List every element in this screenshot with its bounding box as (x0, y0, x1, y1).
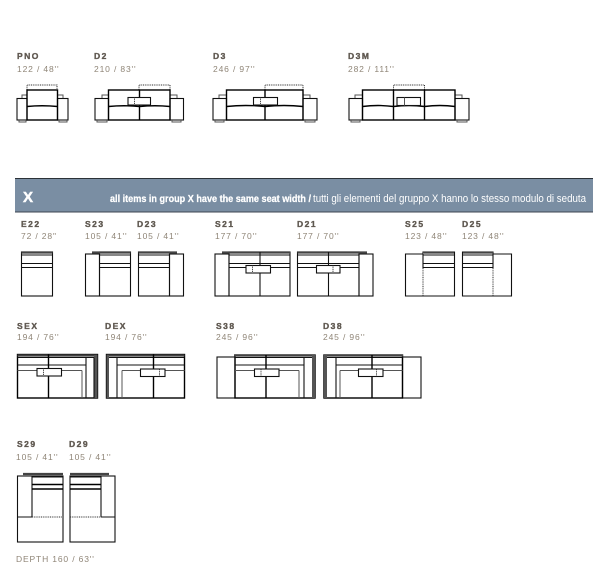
model D3M (348, 51, 469, 122)
model S21: 177 / 70'' (215, 231, 257, 241)
icon: S23 module (86, 252, 130, 296)
model D21: 177 / 70'' (297, 231, 339, 241)
model D29: D29 (69, 439, 89, 449)
model S21 (215, 219, 290, 296)
icon: S29 chaise (18, 474, 63, 542)
icon: D2 sofa (95, 85, 184, 122)
model D2 (94, 51, 184, 122)
model D2: D2 (94, 51, 108, 61)
model SEX: SEX (17, 321, 39, 331)
model E22: 72 / 28" (21, 231, 57, 241)
icon: D21 sofa (298, 252, 373, 296)
model S38: 245 / 96'' (216, 332, 258, 342)
model S29 (16, 439, 63, 542)
model D29 (69, 439, 115, 542)
model D23 (137, 219, 184, 296)
model D25: 123 / 48'' (462, 231, 504, 241)
model D21 (297, 219, 373, 296)
model PNO: 122 / 48'' (17, 64, 59, 74)
model SEX (17, 321, 98, 398)
model SEX: 194 / 76'' (17, 332, 59, 342)
model PNO: PNO (17, 51, 40, 61)
icon: D3 sofa (213, 85, 317, 122)
model D2: 210 / 83'' (94, 64, 136, 74)
icon: DEX corner sofa (106, 354, 184, 398)
model PNO (17, 51, 68, 122)
icon: SEX corner sofa (18, 354, 98, 398)
banner: group X: X (23, 189, 33, 206)
model S25 (405, 219, 454, 296)
model S25: S25 (405, 219, 425, 229)
model S29: S29 (17, 439, 37, 449)
banner: group X: tutti gli elementi del gruppo X hanno lo stesso modulo di seduta (313, 193, 587, 205)
icon: S25 module (406, 252, 454, 296)
model E22: E22 (21, 219, 41, 229)
model DEX: 194 / 76'' (105, 332, 147, 342)
icon: PNO armchair (17, 85, 68, 122)
model D3 (213, 51, 317, 122)
model E22 (21, 219, 57, 296)
model D38 (323, 321, 421, 398)
model D23: 105 / 41'' (137, 231, 179, 241)
model S23: S23 (85, 219, 105, 229)
model D3M: 282 / 111'' (348, 64, 395, 74)
icon: D3M sofa (349, 85, 469, 122)
model D21: D21 (297, 219, 317, 229)
banner: group X: all items in group X have the same seat width / (110, 193, 311, 205)
model S21: S21 (215, 219, 235, 229)
model DEX (105, 321, 184, 398)
icon: D29 chaise (70, 474, 115, 542)
banner: group X (15, 178, 593, 212)
model D23: D23 (137, 219, 157, 229)
model D38: D38 (323, 321, 343, 331)
model D25: D25 (462, 219, 482, 229)
model S38: S38 (216, 321, 236, 331)
model S23 (85, 219, 130, 296)
model D3: D3 (213, 51, 227, 61)
icon: E22 module (22, 252, 52, 296)
depth note: DEPTH 160 / 63'' (16, 554, 95, 564)
model D25 (462, 219, 512, 296)
model S23: 105 / 41'' (85, 231, 127, 241)
model D3: 246 / 97'' (213, 64, 255, 74)
model DEX: DEX (105, 321, 127, 331)
icon: D23 module (138, 252, 184, 296)
icon: D38 corner sofa (324, 355, 421, 398)
icon: S38 corner sofa (217, 355, 315, 398)
model D3M: D3M (348, 51, 370, 61)
model S25: 123 / 48'' (405, 231, 447, 241)
model S29: 105 / 41'' (16, 452, 58, 462)
model D38: 245 / 96'' (323, 332, 365, 342)
icon: D25 module (462, 252, 512, 296)
model S38 (216, 321, 315, 398)
icon: S21 sofa (215, 252, 290, 296)
model D29: 105 / 41'' (69, 452, 111, 462)
